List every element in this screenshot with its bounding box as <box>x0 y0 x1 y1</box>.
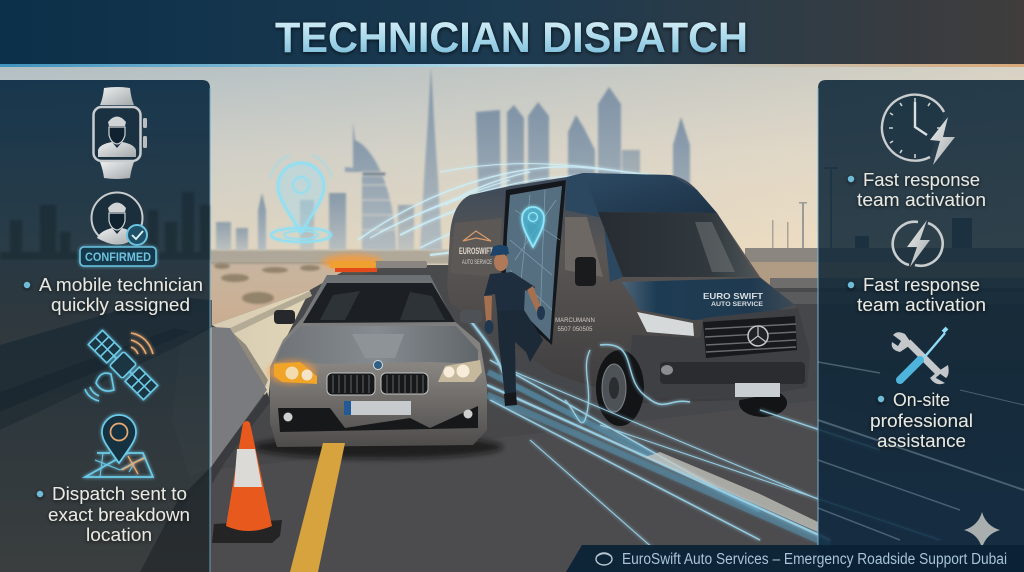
number plate <box>735 383 780 397</box>
sliding door with holographic map <box>500 180 566 345</box>
traffic cone <box>212 421 282 543</box>
rear window with logo: EUROSWIFT <box>459 246 493 256</box>
text: technician assigned: A mobile technician <box>39 275 203 295</box>
mirrors <box>274 310 295 324</box>
car hood <box>275 326 478 364</box>
text: fast response two: Fast response <box>863 275 980 295</box>
hood <box>622 278 795 320</box>
car body <box>270 275 487 447</box>
text: fast response one: team activation <box>857 190 986 210</box>
text: fast response one: Fast response <box>863 170 980 190</box>
text: on-site assistance <box>870 390 973 451</box>
van <box>447 173 810 426</box>
location pin hologram <box>270 155 332 242</box>
car number plate <box>344 401 411 415</box>
icon: brand logo <box>596 553 612 565</box>
light bar <box>322 254 427 272</box>
bumper <box>630 308 810 400</box>
door text: MARCUMANN <box>555 318 595 324</box>
icon: smartwatch technician <box>94 87 147 179</box>
van: EURO SWIFT <box>703 291 764 301</box>
head <box>494 253 508 271</box>
van: AUTO SERVICE <box>711 302 763 308</box>
left headlight <box>268 360 317 384</box>
text: technician assigned: quickly assigned <box>51 295 190 315</box>
rear window with logo: AUTO SERVICE <box>462 259 492 266</box>
torso <box>484 272 535 312</box>
road surface right <box>500 304 1024 572</box>
dim skyline in panel <box>0 192 210 260</box>
car <box>253 254 503 459</box>
lower intake <box>278 406 478 432</box>
lane marking <box>290 443 345 572</box>
panel: right <box>818 80 1024 572</box>
text: dispatch location: location <box>86 525 152 545</box>
Burj Al Arab <box>345 122 396 250</box>
footer banner <box>566 545 1024 572</box>
car windshield <box>303 283 455 323</box>
text: fast response two: team activation <box>857 295 986 315</box>
legs <box>497 310 543 396</box>
text: on-site assistance: On-site <box>893 390 950 410</box>
icon: map pin <box>85 415 153 477</box>
skyline <box>216 67 690 250</box>
signal arcs <box>358 164 675 255</box>
badge: confirmed: CONFIRMED <box>85 250 151 264</box>
icon: sparkle <box>964 512 1000 548</box>
text: dispatch location: exact breakdown <box>48 505 190 525</box>
kidney grille <box>327 360 428 395</box>
van: 5507 050505 <box>557 327 593 333</box>
text: dispatch location <box>37 484 190 545</box>
road light streaks <box>470 320 940 572</box>
wheels <box>739 389 787 417</box>
headlight <box>637 312 694 336</box>
right highway overpass <box>745 167 1024 304</box>
icon: clock with bolt <box>882 95 955 165</box>
front door window and mirror <box>565 217 603 277</box>
text: on-site assistance: professional <box>870 411 973 431</box>
header band <box>0 0 1024 67</box>
front wheel <box>596 350 644 426</box>
panel: left <box>0 80 210 572</box>
van body <box>447 173 810 403</box>
barrier <box>0 290 312 572</box>
text: fast response one <box>848 170 986 210</box>
text: fast response two <box>848 275 986 315</box>
rear window with logo <box>450 218 502 277</box>
title: TECHNICIAN DISPATCH <box>275 14 748 62</box>
icon: confirmed technician avatar <box>92 192 147 245</box>
technician <box>484 245 545 406</box>
grille with star emblem <box>703 316 797 358</box>
text: on-site assistance: assistance <box>877 431 966 451</box>
windshield <box>598 212 757 277</box>
icon: wrench and screwdriver <box>892 328 949 384</box>
text: dispatch location: Dispatch sent to <box>52 484 187 504</box>
icon: satellite <box>85 330 158 401</box>
badge: confirmed <box>80 247 156 266</box>
right headlight <box>438 360 482 382</box>
text: technician assigned <box>24 275 203 315</box>
icon: bolt in ring <box>893 220 943 267</box>
